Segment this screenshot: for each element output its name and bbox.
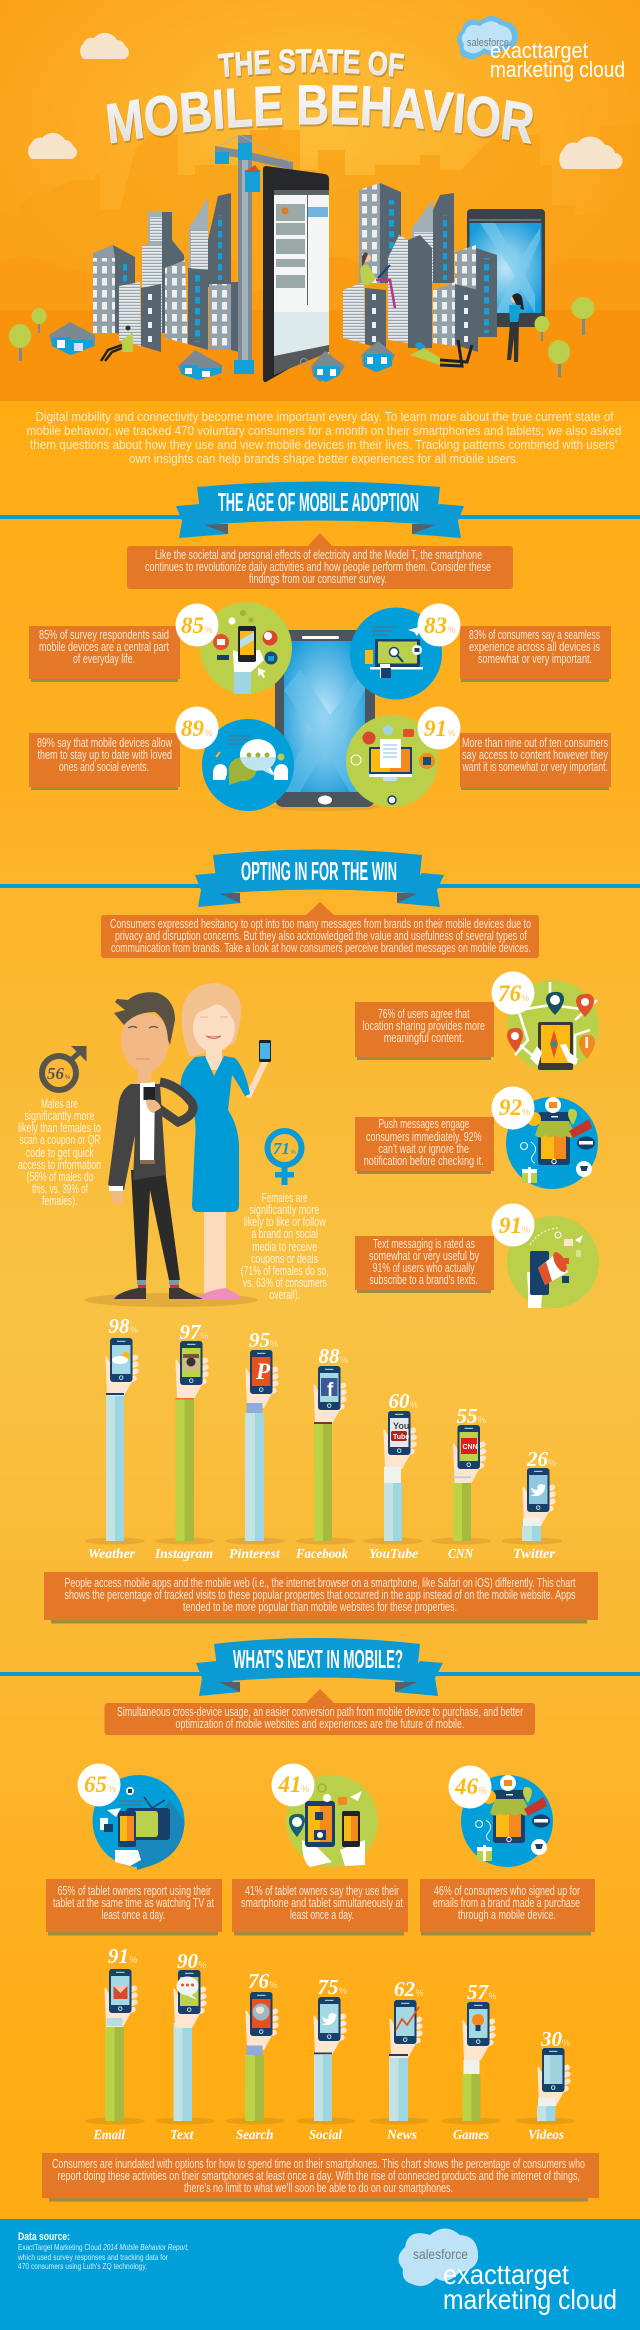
stat panel: 85 percent: mobile devices are a central part bbox=[39, 640, 169, 654]
stat panel: 92 percent push: consumers immediately. 92% bbox=[366, 1130, 482, 1144]
logo: salesforce exacttarget (footer): salesforce bbox=[413, 2246, 468, 2262]
heading ribbon: opting in for the win: OPTING IN FOR THE WIN bbox=[241, 856, 397, 886]
stat panel: 83 percent: somewhat or very important. bbox=[478, 652, 592, 666]
stat panel: 89 percent: 89% say that mobile devices allow bbox=[37, 736, 173, 750]
heading ribbon: what's next in mobile: WHAT'S NEXT IN MOBILE? bbox=[233, 1644, 403, 1674]
footer panel bbox=[0, 2219, 640, 2330]
bar: social 75 bbox=[296, 1975, 356, 2143]
text: males: likely than females to bbox=[18, 1121, 101, 1135]
text box bbox=[46, 1879, 222, 1936]
bar: search 76 bbox=[225, 1969, 285, 2143]
badge: 41: % bbox=[301, 1784, 309, 1794]
badge: 85 bbox=[176, 604, 218, 646]
text: females: coupons or deals bbox=[251, 1252, 318, 1266]
title bbox=[106, 48, 534, 146]
bar: weather 98: 98 bbox=[108, 1314, 130, 1338]
text: males: females). bbox=[42, 1194, 78, 1208]
badge: 83 bbox=[418, 604, 460, 646]
icon: monitor with map bbox=[350, 608, 442, 700]
stat: males 56 percent bbox=[18, 1046, 101, 1208]
bar: youtube 60: % bbox=[410, 1400, 418, 1410]
bar: weather 98: % bbox=[130, 1325, 138, 1335]
bar: facebook 88: % bbox=[340, 1355, 348, 1365]
man bbox=[108, 992, 203, 1299]
text: females: media to receive bbox=[252, 1240, 317, 1254]
icon: storefront phone bbox=[506, 1097, 598, 1189]
callout: adoption intro: Like the societal and personal effects of electricity and the Model T, the smartphone bbox=[155, 548, 482, 562]
stat panel: 85 percent bbox=[29, 602, 292, 694]
panel: hero city illustration bbox=[0, 0, 640, 401]
badge: 83: % bbox=[448, 625, 456, 635]
stat panel: 83 percent: experience across all devices is bbox=[469, 640, 600, 654]
text box bbox=[420, 1879, 595, 1936]
callout: next in mobile intro: optimization of mobile websites and experiences are the future of mobile. bbox=[176, 1717, 464, 1731]
text: females: Females are bbox=[262, 1191, 308, 1205]
stat panel: 92 percent push: can't wait or ignore the bbox=[378, 1142, 469, 1156]
stat: females 71 percent bbox=[241, 1131, 329, 1302]
icon: female symbol: 71 bbox=[273, 1139, 290, 1158]
badge: 85: % bbox=[204, 625, 213, 635]
bar: youtube 60: Tube bbox=[393, 1434, 409, 1441]
bar: cnn 55: 55 bbox=[456, 1404, 478, 1428]
badge: 46: % bbox=[479, 1786, 487, 1796]
callout: adoption intro: findings from our consumer survey. bbox=[249, 572, 387, 586]
stat panel: 46 percent email purchase bbox=[420, 1766, 595, 1936]
stat panel: 92 percent push: Push messages engage bbox=[378, 1117, 469, 1131]
bar: facebook 88 bbox=[295, 1344, 356, 1562]
heading ribbon: the age of mobile adoption bbox=[0, 482, 640, 538]
badge: 92 bbox=[492, 1086, 534, 1130]
icon: male symbol: % bbox=[65, 1075, 71, 1081]
bar: instagram 97: Instagram bbox=[154, 1547, 213, 1562]
icon: female symbol bbox=[268, 1131, 302, 1185]
illustration: man and woman bbox=[84, 983, 271, 1307]
bar: instagram 97: % bbox=[200, 1331, 209, 1341]
heading ribbon: the age of mobile adoption: THE AGE OF MOBILE ADOPTION bbox=[218, 487, 419, 517]
tablet in hero bbox=[263, 166, 329, 382]
text box: emails from a brand made a purchase bbox=[433, 1896, 580, 1910]
text box: least once a day. bbox=[102, 1908, 165, 1922]
badge: 76: % bbox=[521, 993, 529, 1003]
badge: 91 bbox=[418, 706, 460, 750]
text: females: a brand on social bbox=[251, 1227, 318, 1241]
stat panel: 89 percent: ones and social events. bbox=[59, 760, 149, 774]
callout: adoption intro bbox=[127, 533, 513, 589]
text box: tablet at the same time as watching TV at bbox=[53, 1896, 214, 1910]
badge: 46: 46 bbox=[454, 1774, 478, 1799]
callout: apps versus mobile web: tended to be more popular than mobile websites for these properties. bbox=[183, 1600, 457, 1614]
text box bbox=[232, 1879, 408, 1936]
bar: games 57: 57 bbox=[467, 1980, 490, 2004]
badge: 91: 91 bbox=[424, 716, 447, 741]
badge: 89: 89 bbox=[181, 716, 204, 741]
trees bbox=[9, 297, 594, 377]
bar: videos 30: 30 bbox=[540, 2027, 562, 2051]
stat panel: 91 percent texts: somewhat or very useful by bbox=[369, 1249, 480, 1263]
text box: 46% of consumers who signed up for bbox=[434, 1884, 580, 1898]
icon: map with pins bbox=[507, 980, 599, 1072]
bar: cnn 55: CNN bbox=[462, 1444, 478, 1451]
badge: 91 bbox=[492, 1204, 534, 1246]
badge: 91: 91 bbox=[499, 1213, 522, 1238]
bar: text 90: 90 bbox=[177, 1949, 198, 1973]
text: males: Males are bbox=[41, 1097, 78, 1111]
stat panel: 85 percent: of everyday life. bbox=[73, 652, 135, 666]
intro paragraph: own insights can help brands shape better experiences for all mobile users. bbox=[129, 451, 519, 466]
bar: email 91: 91 bbox=[108, 1944, 129, 1968]
badge: 89: % bbox=[204, 728, 213, 738]
icon: TV and phone bbox=[92, 1775, 184, 1870]
bar: search 76: % bbox=[270, 1980, 278, 1990]
logo: salesforce exacttarget (footer) bbox=[398, 2228, 617, 2315]
bar: pinterest 95: Pinterest bbox=[229, 1547, 281, 1562]
bar: facebook 88: 88 bbox=[318, 1344, 340, 1368]
icon: clouds bbox=[28, 33, 623, 169]
bar: facebook 88: f bbox=[327, 1380, 334, 1401]
callout: opting in intro bbox=[101, 902, 539, 958]
text: males: scan a coupon or QR bbox=[20, 1133, 100, 1147]
icon: two phones bbox=[286, 1775, 378, 1867]
bar: pinterest 95: 95 bbox=[249, 1328, 270, 1352]
bar: news 62: 62 bbox=[394, 1977, 416, 2001]
bar: twitter 26: % bbox=[548, 1458, 556, 1468]
text: females: significantly more bbox=[249, 1203, 319, 1217]
bar: facebook 88: Facebook bbox=[295, 1547, 348, 1562]
badge: 92: 92 bbox=[499, 1095, 522, 1120]
bar: games 57 bbox=[441, 1980, 501, 2143]
bar: twitter 26: Twitter bbox=[513, 1547, 556, 1562]
stat panel: 91 percent texts: 91% of users who actually bbox=[373, 1261, 475, 1275]
bar: twitter 26: 26 bbox=[526, 1447, 548, 1471]
text box: smartphone and tablet simultaneously at bbox=[241, 1896, 403, 1910]
bar: news 62: News bbox=[386, 2128, 418, 2143]
title: MOBILE BEHAVIOR bbox=[106, 85, 534, 146]
data source text: 470 consumers using Luth's ZQ technology. bbox=[18, 2261, 147, 2271]
badge: 65 bbox=[78, 1764, 120, 1806]
woman bbox=[181, 983, 271, 1299]
bar: twitter 26 bbox=[502, 1447, 562, 1562]
icon: speech bubbles bbox=[202, 719, 294, 811]
bar: youtube 60: YouTube bbox=[369, 1547, 418, 1562]
text: males: this, vs. 39% of bbox=[32, 1182, 88, 1196]
stat panel: 41 percent smartphone and tablet bbox=[232, 1764, 408, 1936]
icon: hand with phone bbox=[200, 602, 292, 694]
badge: 83: 83 bbox=[424, 613, 447, 638]
text: males: (56% of males do bbox=[26, 1170, 94, 1184]
badge: 89 bbox=[176, 706, 218, 750]
icon: monitor with document bbox=[346, 715, 438, 807]
badge: 46 bbox=[448, 1766, 492, 1808]
callout: smartphone activities bbox=[42, 2153, 599, 2202]
callout: next in mobile intro bbox=[104, 1689, 535, 1735]
bar: email 91 bbox=[85, 1944, 145, 2143]
heading ribbon: what's next in mobile bbox=[0, 1638, 640, 1696]
crane bbox=[215, 135, 293, 374]
text: males: code to get quick bbox=[26, 1146, 94, 1160]
text box: least once a day. bbox=[290, 1908, 354, 1922]
badge: 91: % bbox=[522, 1225, 530, 1235]
people bbox=[101, 252, 524, 366]
badge: 41: 41 bbox=[278, 1772, 302, 1797]
bar: cnn 55: CNN bbox=[448, 1547, 474, 1562]
bar: social 75: Social bbox=[309, 2128, 342, 2143]
stat panel: 91 percent texts: Text messaging is rated as bbox=[373, 1237, 475, 1251]
bar: youtube 60 bbox=[363, 1389, 423, 1562]
bar: text 90 bbox=[155, 1949, 215, 2143]
bar: pinterest 95: P bbox=[255, 1359, 271, 1384]
callout: apps versus mobile web bbox=[44, 1572, 598, 1624]
icon: male symbol bbox=[42, 1046, 86, 1090]
data source text: ExactTarget Marketing Cloud 2014 Mobile Behavior Report, bbox=[18, 2242, 189, 2252]
text box: 41% of tablet owners say they use their bbox=[245, 1884, 399, 1898]
bar: pinterest 95: % bbox=[270, 1339, 278, 1349]
icon: megaphone and phone bbox=[507, 1216, 599, 1308]
stat panel: 92 percent push: notification before checking it. bbox=[364, 1154, 484, 1168]
logo: salesforce exacttarget (top): salesforce bbox=[467, 37, 509, 49]
data source text: Data source: bbox=[18, 2231, 70, 2243]
data source text: which used survey responses and tracking data for bbox=[17, 2252, 168, 2262]
text box: 65% of tablet owners report using their bbox=[58, 1884, 211, 1898]
stat panel: 76 percent location: 76% of users agree that bbox=[378, 1007, 470, 1021]
stat panel: 91 percent texts bbox=[355, 1204, 599, 1308]
left buildings bbox=[93, 193, 239, 352]
stat panel: 91 percent texts: subscribe to a brand's texts. bbox=[369, 1273, 478, 1287]
bar: search 76: Search bbox=[236, 2128, 274, 2143]
bar: weather 98: Weather bbox=[88, 1547, 136, 1562]
badge: 91: % bbox=[448, 728, 456, 738]
bar: weather 98 bbox=[85, 1314, 145, 1562]
text: females: vs. 63% of consumers bbox=[243, 1276, 327, 1290]
bar: text 90: Text bbox=[170, 2128, 195, 2143]
text: males bbox=[18, 1097, 101, 1208]
bar: games 57: % bbox=[488, 1991, 497, 2001]
callout: smartphone activities: there's no limit to what we'll soon be able to do on our smartphones. bbox=[184, 2181, 453, 2195]
title: THE STATE OF bbox=[218, 48, 405, 79]
page background bbox=[0, 401, 640, 2221]
text: females: (71% of females do so, bbox=[241, 1264, 329, 1278]
stat panel: 89 percent bbox=[29, 706, 294, 811]
bar: youtube 60: You bbox=[393, 1421, 409, 1431]
text: females bbox=[241, 1191, 329, 1302]
stat panel: 91 percent bbox=[346, 706, 611, 807]
bar: email 91: % bbox=[130, 1955, 138, 1965]
bar chart: app visits by property bbox=[85, 1314, 562, 1562]
bar: news 62: % bbox=[416, 1988, 424, 1998]
badge: 65: 65 bbox=[84, 1772, 107, 1797]
houses bbox=[49, 322, 395, 382]
right buildings bbox=[343, 183, 545, 352]
bar: instagram 97 bbox=[154, 1320, 215, 1562]
heading ribbon: opting in for the win bbox=[0, 850, 640, 907]
bar: games 57: Games bbox=[453, 2128, 489, 2143]
bar: news 62 bbox=[369, 1977, 429, 2143]
bar: instagram 97: 97 bbox=[180, 1320, 202, 1344]
badge: 92: % bbox=[522, 1107, 530, 1117]
stat panel: 85 percent: 85% of survey respondents said bbox=[39, 628, 169, 642]
bar: cnn 55: % bbox=[478, 1415, 486, 1425]
tablet with blue screen bbox=[467, 209, 545, 327]
callout: adoption intro: continues to revolutionize daily activities and how people perform them. Consider these bbox=[145, 560, 491, 574]
stat panel: 92 percent push bbox=[355, 1086, 598, 1189]
intro paragraph bbox=[26, 409, 622, 466]
logo: salesforce exacttarget (footer): exacttarget bbox=[443, 2259, 569, 2290]
bar: videos 30: % bbox=[562, 2038, 570, 2048]
text: males: significantly more bbox=[24, 1109, 95, 1123]
bar chart: smartphone activities bbox=[85, 1944, 575, 2143]
bar: text 90: % bbox=[198, 1960, 207, 1970]
stat panel: 83 percent bbox=[350, 604, 611, 700]
badge: 76: 76 bbox=[498, 981, 522, 1006]
text: females: likely to like or follow bbox=[244, 1215, 326, 1229]
icon: storefront phone bbox=[461, 1775, 553, 1867]
logo: salesforce exacttarget (top) bbox=[457, 16, 625, 82]
text: females: overall). bbox=[269, 1288, 300, 1302]
bar: email 91: Email bbox=[93, 2128, 125, 2143]
bar: youtube 60: 60 bbox=[388, 1389, 410, 1413]
bar: social 75: % bbox=[339, 1986, 347, 1996]
text: males: access to information bbox=[18, 1158, 101, 1172]
stat panel: 76 percent location: meaningful content. bbox=[384, 1031, 464, 1045]
bar: social 75: 75 bbox=[318, 1975, 338, 1999]
badge: 65: % bbox=[108, 1784, 116, 1794]
stat panel: 89 percent: them to stay up to date with loved bbox=[38, 748, 172, 762]
central phone bbox=[270, 630, 380, 811]
stat panel: 65 percent tablet and TV bbox=[46, 1764, 222, 1936]
icon: male symbol: 56 bbox=[47, 1064, 64, 1083]
stat panel: 76 percent location: location sharing provides more bbox=[362, 1019, 485, 1033]
logo: salesforce exacttarget (footer): marketing cloud bbox=[443, 2284, 617, 2315]
data source text bbox=[17, 2231, 189, 2271]
icon: female symbol: % bbox=[290, 1150, 296, 1156]
badge: 76 bbox=[492, 972, 534, 1014]
bar: search 76: 76 bbox=[248, 1969, 270, 1993]
bar: videos 30 bbox=[515, 2027, 575, 2143]
bar: videos 30: Videos bbox=[528, 2128, 565, 2143]
logo: salesforce exacttarget (top): exacttarget bbox=[490, 38, 588, 63]
badge: 85: 85 bbox=[181, 613, 204, 638]
stat panel: 76 percent location bbox=[355, 972, 599, 1072]
badge: 41 bbox=[272, 1764, 314, 1806]
bar: pinterest 95 bbox=[225, 1328, 285, 1562]
bar: cnn 55 bbox=[431, 1404, 491, 1562]
text box: through a mobile device. bbox=[458, 1908, 556, 1922]
